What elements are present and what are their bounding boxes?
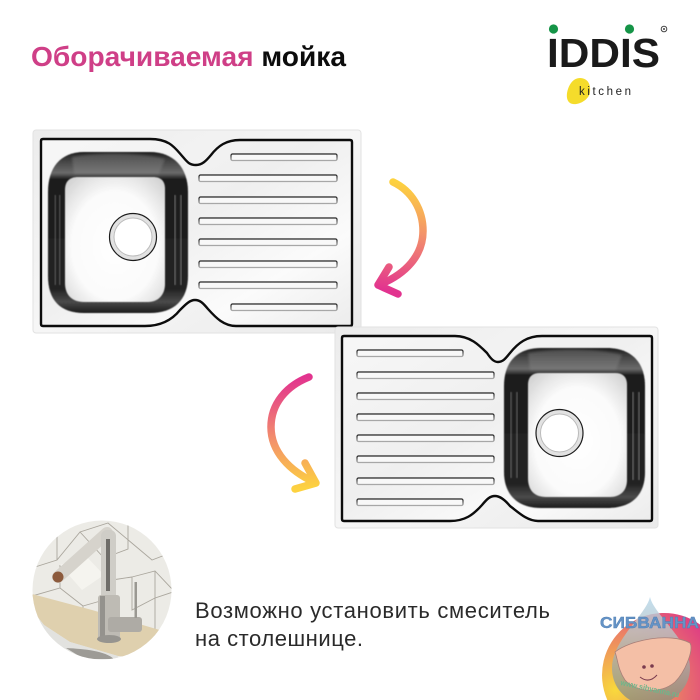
drain	[110, 214, 156, 260]
wood countertop	[32, 594, 159, 656]
photo: faucet on countertop	[32, 520, 173, 660]
bath character	[615, 638, 691, 690]
logo: IDDIS kitchen	[547, 24, 667, 104]
caption text: на столешнице.	[195, 626, 363, 651]
rim outline	[342, 336, 652, 521]
brand name: СИБВАННА	[600, 615, 699, 632]
drainboard ribs	[357, 350, 494, 506]
arrow: top sink rotates down	[378, 182, 423, 294]
logo: IDDIS kitchen: kitchen	[579, 86, 631, 98]
sink bottom: bowl on the right	[335, 327, 658, 528]
bowl	[504, 348, 645, 508]
arrow: rotates to bottom sink	[271, 377, 316, 489]
drainboard ribs	[199, 154, 337, 310]
sink edge	[66, 648, 114, 659]
site url: www.sibvanna.ru	[619, 678, 680, 699]
caption text	[195, 598, 550, 651]
drain	[536, 410, 583, 456]
watermark: Сибванна	[600, 597, 700, 700]
logo: IDDIS kitchen: IDDIS	[547, 30, 660, 76]
title: Оборачиваемая мойка	[31, 41, 347, 72]
sink top: bowl on the left	[33, 130, 361, 333]
tile pattern	[32, 522, 173, 640]
water drop	[612, 597, 690, 700]
steel plate	[335, 327, 658, 528]
bowl	[48, 152, 188, 313]
rim outline	[41, 139, 352, 326]
steel plate	[33, 130, 361, 333]
caption text: Возможно установить смеситель	[195, 598, 550, 623]
faucet	[52, 530, 142, 643]
